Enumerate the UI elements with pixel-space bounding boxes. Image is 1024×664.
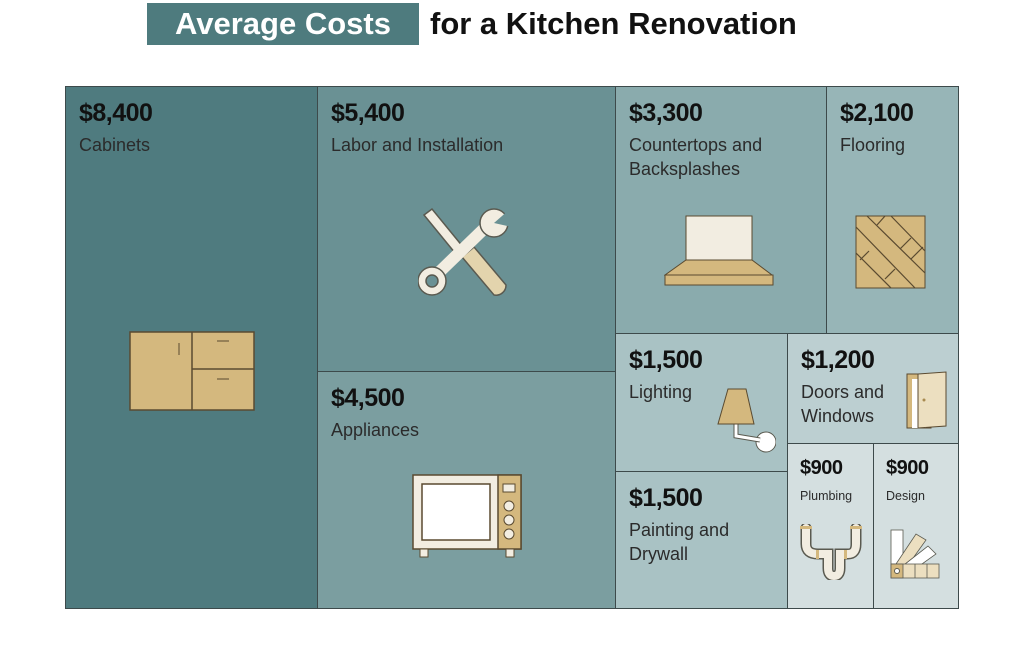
icon: color swatches	[890, 530, 940, 578]
panel: design: $900	[886, 457, 928, 479]
panel: plumbing	[787, 443, 874, 609]
panel: cabinets: $8,400	[79, 99, 152, 127]
panel: countertops	[615, 86, 827, 334]
icon: cabinet	[129, 331, 255, 411]
icon: wall lamp	[717, 388, 776, 452]
panel: appliances	[317, 371, 616, 609]
panel: design: Design	[886, 489, 925, 503]
panel: doors: Windows	[801, 406, 874, 426]
icon: tools	[418, 208, 508, 296]
panel: appliances: $4,500	[331, 384, 404, 412]
panel: cabinets	[65, 86, 318, 609]
panel: doors: Doors and	[801, 382, 884, 402]
panel: painting: Painting and	[629, 520, 729, 540]
panel: lighting: $1,500	[629, 346, 702, 374]
panel: plumbing: Plumbing	[800, 489, 852, 503]
panel: flooring: $2,100	[840, 99, 913, 127]
panel: labor: Labor and Installation	[331, 135, 503, 155]
panel: labor: $5,400	[331, 99, 404, 127]
panel: painting: $1,500	[629, 484, 702, 512]
panel: cabinets: Cabinets	[79, 135, 150, 155]
panel: doors	[787, 333, 959, 444]
panel: lighting: Lighting	[629, 382, 692, 402]
panel: countertops: Countertops and	[629, 135, 762, 155]
title: for a Kitchen Renovation	[430, 6, 797, 41]
icon: pipes	[800, 524, 862, 580]
title	[147, 3, 797, 45]
icon: floor tiles	[856, 216, 926, 288]
panel: appliances: Appliances	[331, 420, 419, 440]
panel: painting: Drywall	[629, 544, 688, 564]
panel: countertops: $3,300	[629, 99, 702, 127]
panel: plumbing: $900	[800, 457, 842, 479]
panel: painting	[615, 471, 788, 609]
panel: labor	[317, 86, 616, 372]
panel: flooring: Flooring	[840, 135, 905, 155]
icon: countertop	[664, 216, 774, 286]
icon: microwave	[412, 474, 522, 558]
panel: lighting	[615, 333, 788, 472]
panel: doors: $1,200	[801, 346, 874, 374]
panel: flooring	[826, 86, 959, 334]
title: Average Costs	[175, 6, 391, 41]
panel: countertops: Backsplashes	[629, 159, 740, 179]
icon: door	[906, 372, 946, 428]
panel: design	[873, 443, 959, 609]
